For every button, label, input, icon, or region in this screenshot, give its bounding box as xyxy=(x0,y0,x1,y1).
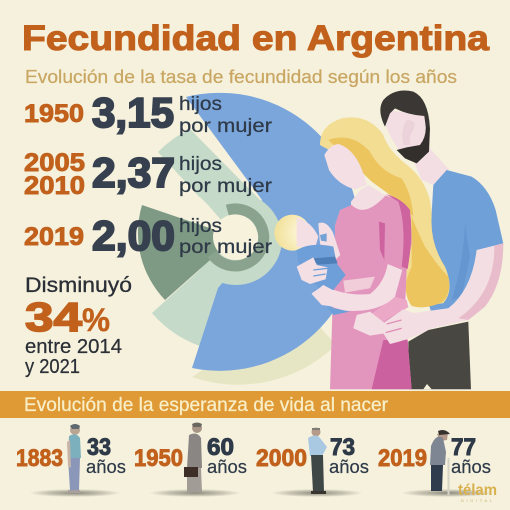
man: face xyxy=(384,111,430,163)
item: 2019: años xyxy=(451,457,491,477)
baby: face xyxy=(297,217,318,248)
woman: neck xyxy=(351,185,386,212)
row: 2019: 2019 xyxy=(24,223,84,251)
sector: 2019 dark green xyxy=(138,205,236,300)
woman: hair dark upper xyxy=(328,138,413,217)
man: neck xyxy=(412,148,449,185)
row: 2005-2010: hijos xyxy=(179,154,222,175)
ring: light green xyxy=(190,193,282,285)
woman: dress dark lower xyxy=(372,340,412,389)
logo: telam: télam xyxy=(458,482,497,499)
row: 2019 xyxy=(24,212,273,259)
woman: dress shadow xyxy=(386,194,411,269)
man: shirt fold xyxy=(452,223,470,300)
item: 2000: 73 xyxy=(330,434,355,461)
figure: man with briefcase xyxy=(149,422,241,497)
figure: elderly man with cane xyxy=(401,430,493,497)
man: arm shadow xyxy=(458,243,503,320)
callout: decrease: entre 2014 xyxy=(25,336,122,358)
baby: sleeve dot xyxy=(320,233,327,242)
figure: young man xyxy=(29,424,121,497)
sector: 2005-2010 light green xyxy=(152,129,270,346)
man: face shade xyxy=(402,120,415,145)
figure: older man xyxy=(271,428,363,497)
row: 2005-2010: 2,37 xyxy=(92,149,175,196)
row: 1950: 1950 xyxy=(24,100,84,128)
woman: lower hand xyxy=(353,312,385,336)
item: 2019: 2019 xyxy=(378,445,427,472)
item: 1883 xyxy=(16,424,126,497)
man: finger lines xyxy=(386,320,402,333)
band: life expectancy xyxy=(0,391,510,418)
title: Fecundidad en Argentina xyxy=(22,19,490,58)
woman: upper arm xyxy=(312,264,402,311)
baby: blanket xyxy=(297,245,346,290)
item: 2000: 2000 xyxy=(256,445,307,472)
woman: sleeve fold xyxy=(379,222,385,260)
polar chart xyxy=(138,93,359,385)
woman: dress xyxy=(330,195,412,389)
woman: hair dark lower xyxy=(406,217,449,307)
item: 1950: años xyxy=(207,457,247,477)
callout: decrease: 34 xyxy=(25,294,82,340)
callout: decrease: % xyxy=(82,302,110,338)
illustration: family xyxy=(274,91,503,389)
ring: dark green arc xyxy=(212,209,264,266)
woman: hand finger lines xyxy=(313,268,328,276)
ring: centre hole xyxy=(213,214,259,260)
item: 1883: 33 xyxy=(87,434,111,461)
sector: 1950 blue xyxy=(186,93,359,371)
callout: decrease: y 2021 xyxy=(25,356,80,378)
item: 2019: 77 xyxy=(451,434,476,461)
row: 2005-2010: 2010 xyxy=(24,172,85,200)
woman: belly shade xyxy=(370,297,408,327)
row: 2019: por mujer xyxy=(179,237,273,258)
item: 2000 xyxy=(256,428,369,497)
man: beard xyxy=(397,125,430,163)
woman: hand on baby xyxy=(297,257,328,284)
baby: head xyxy=(274,215,310,251)
row: 1950: 3,15 xyxy=(92,89,174,136)
man: arm xyxy=(412,243,503,330)
sector: outer shadow xyxy=(192,305,336,385)
item: 2019 xyxy=(378,430,493,497)
item: 1883: 1883 xyxy=(16,445,63,472)
baby: blanket lower xyxy=(327,307,350,315)
item: 1950: 60 xyxy=(207,434,234,461)
item: 1950: 1950 xyxy=(134,445,183,472)
baby: blanket fold xyxy=(310,257,338,265)
woman: fingers xyxy=(312,285,342,307)
callout: decrease xyxy=(25,274,132,378)
callout: decrease: Disminuyó xyxy=(25,274,132,297)
woman: belly band xyxy=(343,277,375,293)
band: life expectancy: Evolución de la esperanza de vida al nacer xyxy=(24,395,389,416)
row: 1950 xyxy=(24,89,273,137)
row: 2005-2010 xyxy=(24,149,273,200)
row: 2019: hijos xyxy=(179,216,222,237)
row: 2019: 2,00 xyxy=(92,212,175,259)
row: 2005-2010: 2005 xyxy=(24,149,85,177)
woman: breast xyxy=(318,223,340,265)
woman: face xyxy=(324,144,367,189)
subtitle: Evolución de la tasa de fecundidad según los años xyxy=(25,67,457,87)
woman: hair light xyxy=(320,117,450,307)
row: 2005-2010: por mujer xyxy=(179,176,273,197)
man: pants xyxy=(408,322,471,389)
row: 1950: hijos xyxy=(179,94,222,115)
item: 2000: años xyxy=(329,457,369,477)
gap: cream wedge xyxy=(140,197,236,237)
logo: telam: DIGITAL xyxy=(461,498,493,503)
man: t-shirt xyxy=(422,170,503,323)
man: hand xyxy=(383,309,428,344)
row: 1950: por mujer xyxy=(179,116,273,137)
item: 1883: años xyxy=(86,457,126,477)
pants gap xyxy=(423,384,432,389)
man: hair xyxy=(380,91,430,128)
item: 1950 xyxy=(134,422,247,497)
